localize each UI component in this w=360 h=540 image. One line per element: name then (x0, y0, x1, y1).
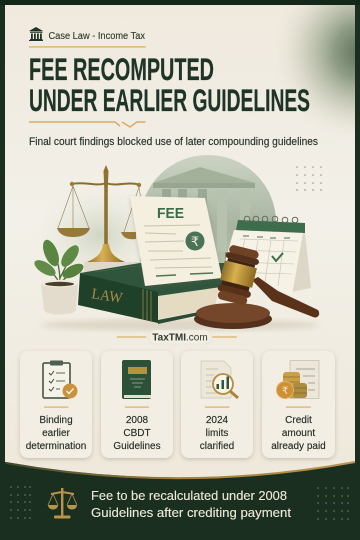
table shadow (40, 319, 320, 331)
law book: LAW (90, 286, 124, 307)
card 1: binding earlier determination: earlier (42, 428, 71, 439)
card 4: credit amount already paid (262, 351, 335, 458)
footer message (91, 489, 292, 520)
document: FEE: FEE (157, 205, 184, 222)
title ornament (29, 122, 146, 127)
card 3: 2024 limits clarified (181, 351, 253, 458)
document: FEE (130, 196, 222, 286)
calendar (222, 216, 311, 295)
card 3: 2024 limits clarified: limits (206, 428, 228, 439)
footer icon: scales (48, 488, 77, 518)
icon: balance scales (57, 165, 141, 262)
title (29, 51, 310, 118)
subtitle: Final court findings blocked use of later compounding guidelines (29, 136, 319, 148)
card 2: 2008 CBDT guidelines: Guidelines (113, 441, 161, 452)
card 2: 2008 CBDT guidelines: 2008 (126, 415, 149, 426)
icon: courthouse (29, 27, 43, 41)
header tag: Case Law - Income Tax (29, 27, 145, 42)
brand tag: TaxTMI.com: TaxTMI.com (152, 332, 208, 344)
gavel (194, 244, 319, 329)
brand tag: TaxTMI.com (117, 330, 237, 344)
card 2: 2008 CBDT guidelines: CBDT (123, 428, 151, 439)
rupee badge (186, 232, 204, 250)
card 3: 2024 limits clarified: clarified (200, 441, 234, 452)
hero illustration (32, 155, 322, 331)
card 1: binding earlier determination: determination (26, 441, 86, 452)
header tag: Case Law - Income Tax: Case Law - Income Tax (48, 31, 145, 42)
card 4: credit amount already paid: already paid (271, 441, 326, 452)
icon: clipboard (43, 360, 78, 398)
card 1: binding earlier determination: Binding (39, 415, 73, 426)
footer message: Guidelines after crediting payment (91, 506, 292, 520)
card 1: binding earlier determination (20, 351, 92, 458)
footer dot grid right (317, 487, 349, 520)
icon: coins and document: ₹ (282, 386, 288, 397)
icon: green book (122, 360, 151, 399)
footer message: Fee to be recalculated under 2008 (91, 489, 287, 503)
document: FEE: ₹ (191, 235, 199, 250)
card 3: 2024 limits clarified: 2024 (206, 415, 229, 426)
icon: report with magnifier (201, 361, 238, 398)
law book (78, 263, 225, 324)
background halo and courthouse (32, 155, 276, 290)
card 4: credit amount already paid: amount (282, 428, 315, 439)
icon: potted plant (32, 238, 86, 314)
title: FEE RECOMPUTED (29, 51, 214, 87)
card 2: 2008 CBDT guidelines (101, 351, 173, 458)
ledge (84, 262, 142, 272)
dot grid: hero (296, 166, 322, 191)
card 4: credit amount already paid: Credit (285, 415, 312, 426)
footer dot grid left (10, 486, 31, 519)
header gold rule (29, 46, 146, 48)
